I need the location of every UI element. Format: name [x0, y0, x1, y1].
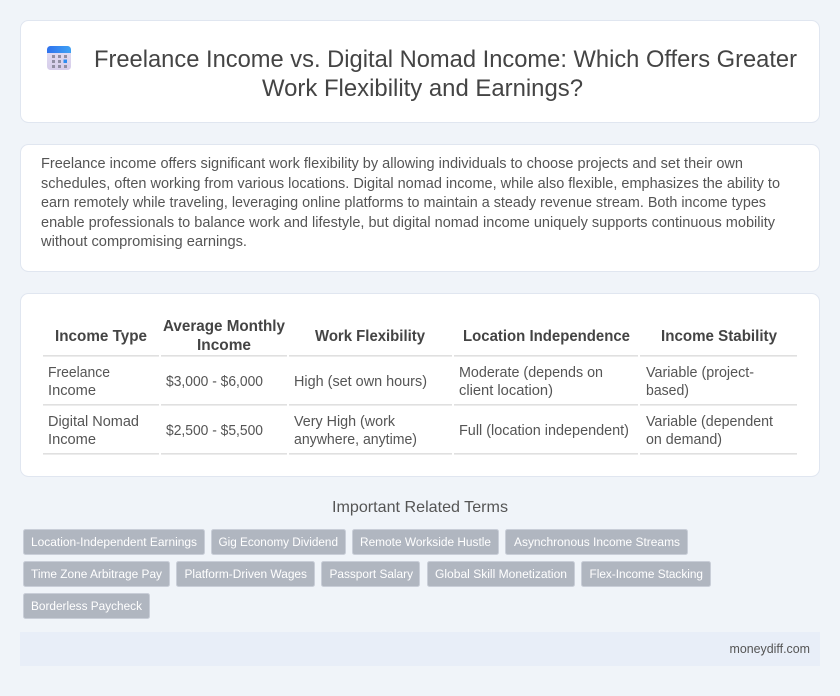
table row: digital nomad income: Full (location independent): [459, 423, 629, 439]
intro text block: [40, 156, 780, 250]
table header row: Income Stability: [661, 328, 777, 345]
table header row: Work Flexibility: [315, 328, 425, 345]
table row: freelance income: Variable (project-: [646, 365, 754, 381]
related term tags: [24, 530, 710, 618]
table header row: Average Monthly: [163, 318, 285, 335]
table row: freelance income: $3,000 - $6,000: [166, 374, 263, 390]
tag: asynchronous income streams: Asynchronous Income Streams: [514, 535, 680, 549]
table row: digital nomad income: anywhere, anytime): [294, 432, 417, 448]
table header row: Income Type: [55, 328, 147, 345]
table row: freelance income: [48, 365, 754, 399]
tag: remote workside hustle: [352, 530, 498, 554]
table header row: Location Independence: [463, 328, 630, 345]
table row: freelance income: Income: [48, 383, 96, 399]
table row: digital nomad income: on demand): [646, 432, 722, 448]
tag: global skill monetization: Global Skill Monetization: [435, 567, 567, 581]
table row: digital nomad income: [48, 414, 773, 448]
intro text block: enable professionals to balance work and lifestyle, but digital nomad income uniquely supports continuous mobility: [41, 215, 776, 231]
table row: digital nomad income: $2,500 - $5,500: [166, 423, 263, 439]
table row: digital nomad income: Variable (dependent: [646, 414, 773, 430]
tag: passport salary: [322, 562, 420, 586]
title: Freelance Income vs. Digital Nomad Income: Which Offers Greater: [94, 46, 797, 73]
panel: title header: [20, 20, 820, 122]
title: Work Flexibility and Earnings?: [262, 75, 583, 102]
tag: borderless paycheck: Borderless Paycheck: [31, 599, 143, 613]
tag: location-independent earnings: Location-Independent Earnings: [31, 535, 197, 549]
title: [94, 46, 797, 102]
tag: gig economy dividend: [212, 530, 346, 554]
table row: digital nomad income: Very High (work: [294, 414, 396, 430]
footer: moneydiff.com: [730, 641, 810, 656]
table row: digital nomad income: Digital Nomad: [48, 414, 139, 430]
intro text block: earn remotely while traveling, leveraging online platforms to maintain a steady revenue stream. Both income types: [41, 195, 766, 211]
tag: flex-income stacking: [582, 562, 710, 586]
tag: asynchronous income streams: [506, 530, 688, 554]
tag: borderless paycheck: [24, 594, 150, 618]
intro text block: schedules, often working from various locations. Digital nomad income, while also flexible, emphasizes the ability to: [41, 176, 780, 192]
tag: remote workside hustle: Remote Workside Hustle: [360, 535, 491, 549]
table row: freelance income: based): [646, 383, 689, 399]
heading: important related terms: Important Related Terms: [332, 499, 508, 516]
intro text block: Freelance income offers significant work flexibility by allowing individuals to choose projects and set their own: [41, 156, 743, 172]
panel: comparison table: [20, 294, 820, 476]
tag: location-independent earnings: [24, 530, 204, 554]
table header row: Income: [197, 337, 251, 354]
tag: time zone arbitrage pay: [24, 562, 170, 586]
table row: freelance income: Moderate (depends on: [459, 365, 603, 381]
tag: platform-driven wages: Platform-Driven Wages: [184, 567, 307, 581]
tag: global skill monetization: [428, 562, 574, 586]
footer: [20, 632, 820, 666]
table row: freelance income: High (set own hours): [294, 374, 427, 390]
icon: calendar: [47, 46, 71, 70]
tag: flex-income stacking: Flex-Income Stacking: [590, 567, 703, 581]
table row: digital nomad income: Income: [48, 432, 96, 448]
tag: gig economy dividend: Gig Economy Dividend: [218, 535, 338, 549]
panel: introduction: [20, 144, 820, 272]
intro text block: without compromising earnings.: [40, 234, 247, 250]
tag: passport salary: Passport Salary: [330, 567, 414, 581]
table row: freelance income: client location): [459, 383, 553, 399]
tag: platform-driven wages: [176, 562, 314, 586]
table row: freelance income: Freelance: [48, 365, 110, 381]
table header row: [55, 318, 777, 354]
tag: time zone arbitrage pay: Time Zone Arbitrage Pay: [31, 567, 163, 581]
